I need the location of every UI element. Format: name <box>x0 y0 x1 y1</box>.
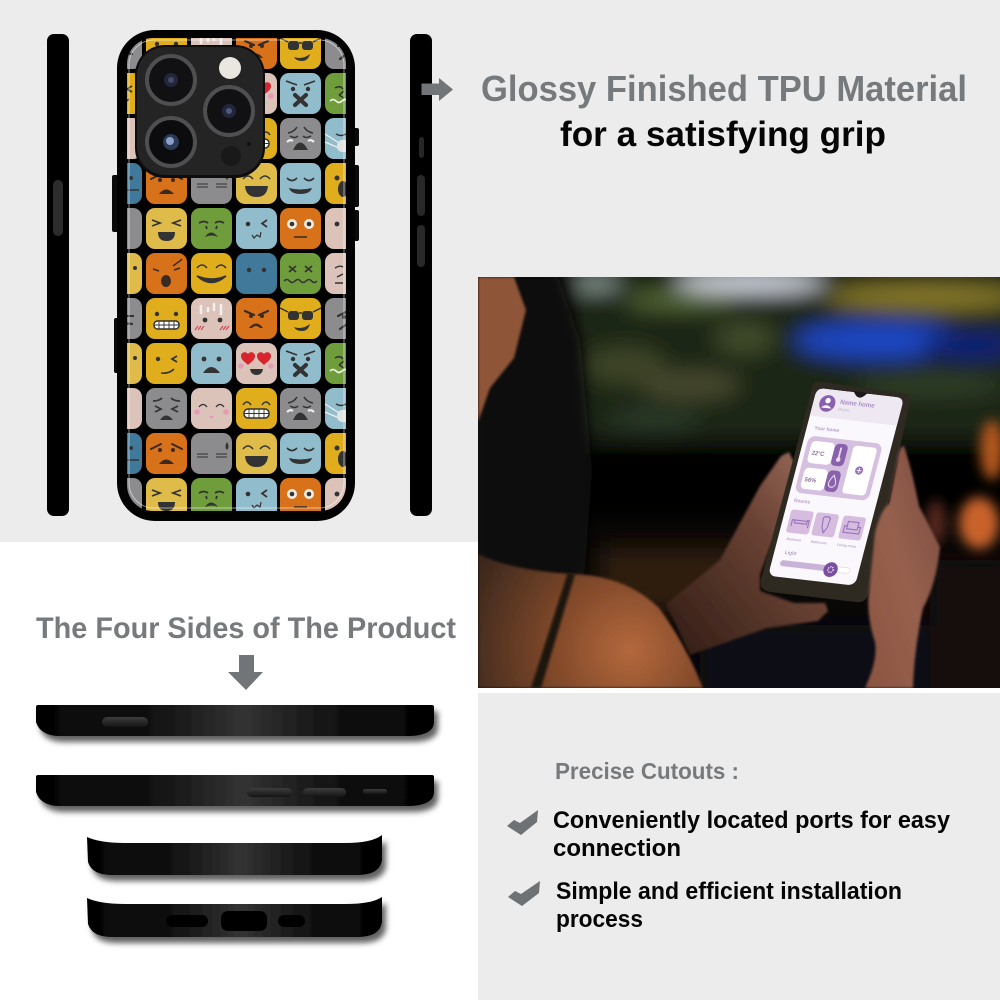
phone screen interface: Your home <box>814 425 840 434</box>
flash <box>219 57 241 79</box>
checkmark two <box>508 881 540 906</box>
room tiles <box>786 509 814 535</box>
arrow pointing down <box>228 655 263 690</box>
phone screen interface: Bedroom <box>786 537 802 543</box>
side view: plain short edge <box>87 835 382 875</box>
right side view of case <box>410 34 432 516</box>
blurred background <box>569 262 1000 700</box>
emoji pattern <box>127 38 346 511</box>
phone screen interface: Living room <box>837 543 856 549</box>
shoulder <box>478 554 703 688</box>
left hand <box>666 452 828 655</box>
feature two text: Simple and efficient installation <box>556 878 902 905</box>
case side buttons <box>112 128 359 373</box>
light slider <box>780 560 851 574</box>
camera island <box>135 45 265 178</box>
side view: top edge <box>36 705 434 736</box>
heading: precise cutouts: Precise Cutouts : <box>555 758 739 784</box>
side view: port cutouts edge <box>87 897 382 937</box>
lifestyle photo: hands holding phone <box>478 262 1000 700</box>
feature one text: connection <box>553 835 681 862</box>
phone screen interface: Light <box>784 550 798 557</box>
subheading: satisfying grip: for a satisfying grip <box>560 115 886 154</box>
phone screen interface: Device <box>838 407 850 413</box>
lens right <box>205 87 253 135</box>
lens bottom left <box>147 118 195 166</box>
phone body <box>761 382 910 602</box>
phone screen interface <box>768 387 904 586</box>
feature one text <box>553 807 951 862</box>
left side view of case <box>47 34 69 516</box>
feature two text <box>556 878 902 933</box>
side view: button edge <box>36 775 434 806</box>
phone case back view <box>101 28 366 521</box>
heading: four sides: The Four Sides of The Product <box>36 612 456 645</box>
background: gray upper-left and top panel <box>0 0 1000 542</box>
home card <box>794 435 883 501</box>
dress strap <box>531 572 575 688</box>
phone screen interface: Rooms <box>793 498 811 506</box>
right hand <box>865 446 940 688</box>
profile icon <box>819 395 836 412</box>
app header: Name home <box>839 399 876 410</box>
phone screen interface: 22°C <box>811 451 826 458</box>
lens top left <box>147 56 195 104</box>
hair <box>558 277 592 524</box>
phone screen interface: 56% <box>804 477 817 485</box>
arrow pointing to heading <box>422 78 453 101</box>
heading: glossy material: Glossy Finished TPU Material <box>481 68 967 109</box>
neck and cheek skin <box>478 277 526 422</box>
feature one text: Conveniently located ports for easy <box>553 807 951 834</box>
lidar sensor <box>221 146 241 166</box>
panel: gray lower-right features <box>478 693 1000 1000</box>
checkmark one <box>507 810 538 835</box>
case shell <box>117 30 355 521</box>
glossy highlight line <box>129 40 344 508</box>
feature two text: process <box>556 906 643 933</box>
phone screen interface: Bathroom <box>810 540 827 545</box>
